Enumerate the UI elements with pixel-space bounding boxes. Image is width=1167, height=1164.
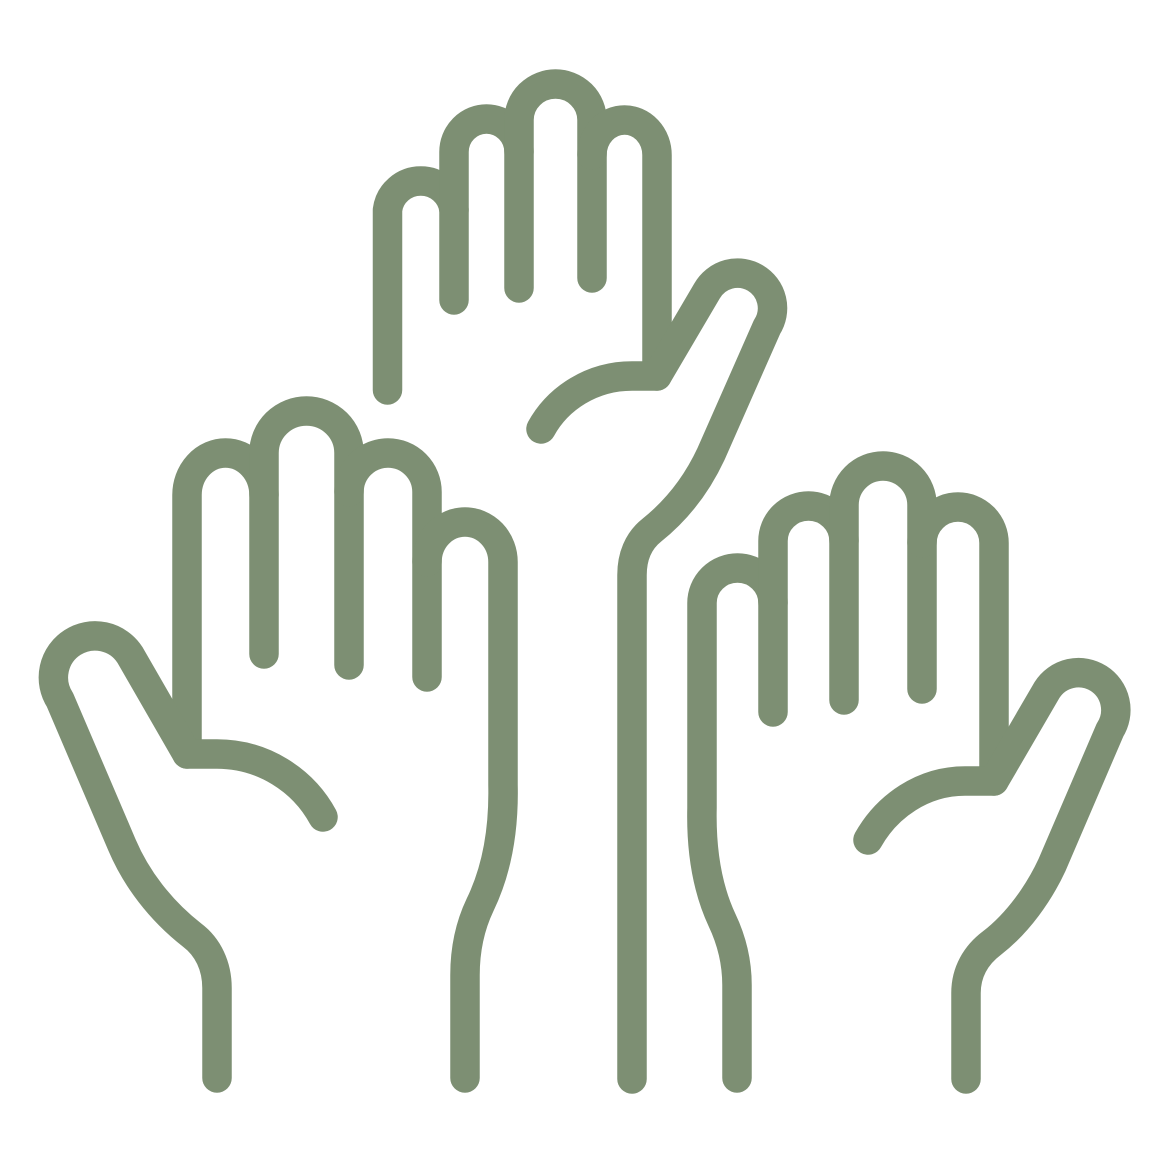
icon: centre raised hand: [388, 84, 773, 1079]
icon: left raised hand: [53, 411, 503, 1078]
icon: right raised hand: [702, 466, 1116, 1079]
